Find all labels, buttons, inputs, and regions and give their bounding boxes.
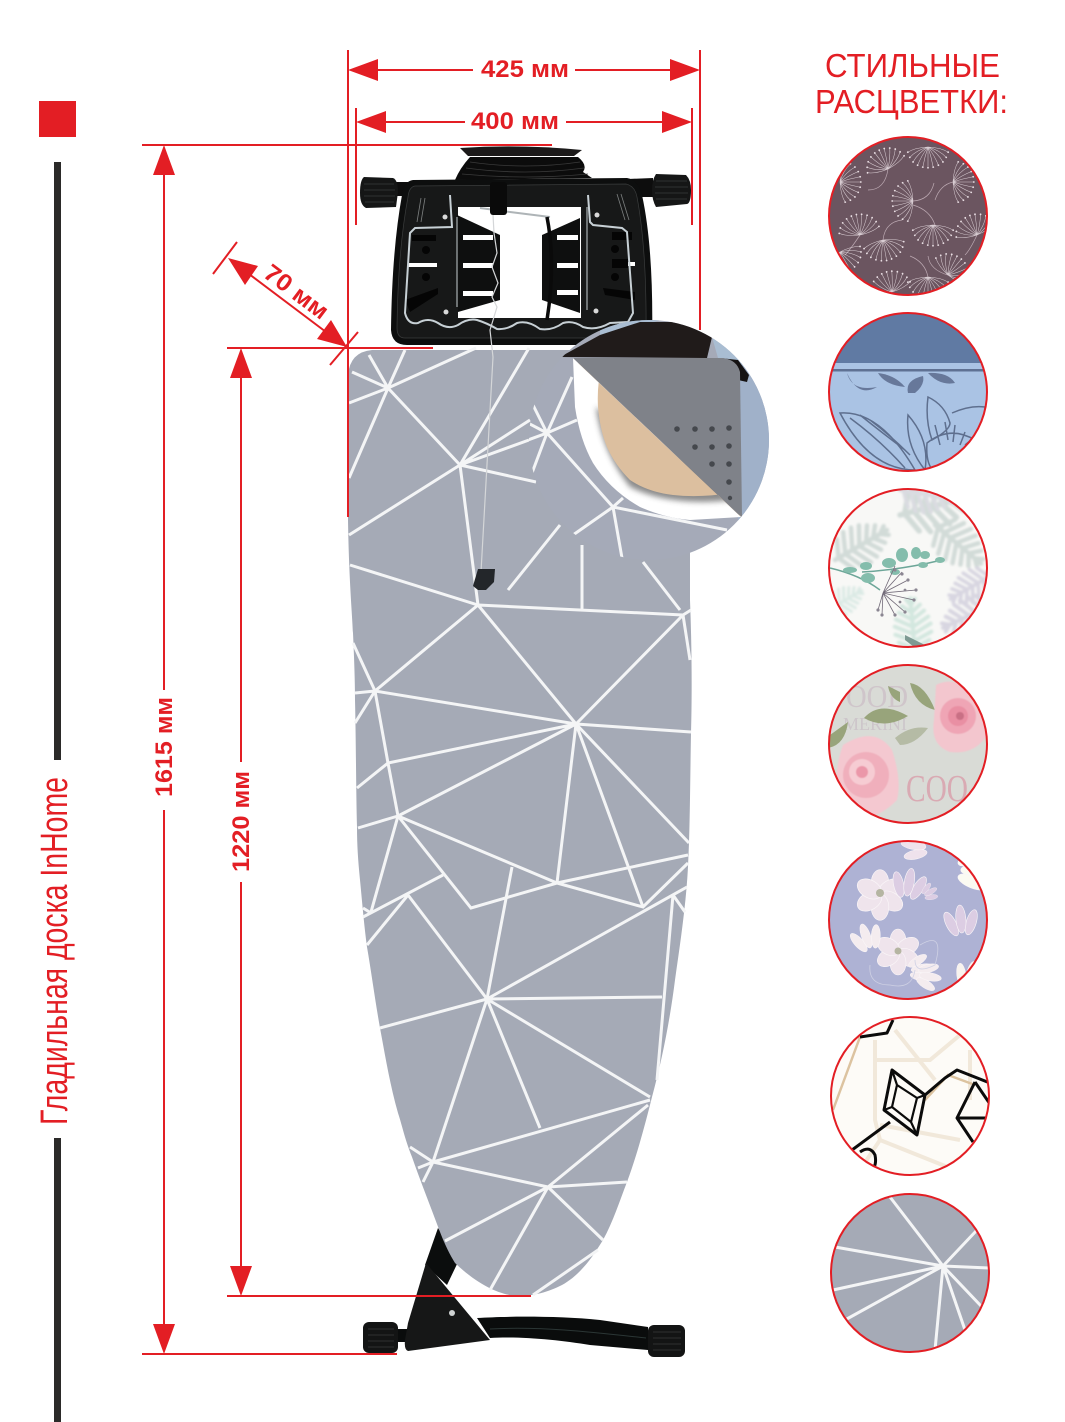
wire (481, 215, 498, 572)
plate dimples (405, 232, 635, 312)
tan shadow (596, 407, 733, 502)
label 1615: 1615 мм (151, 697, 178, 797)
inset dark band (560, 322, 712, 358)
dimension: 1615 mm (142, 145, 552, 1354)
red square marker (39, 101, 76, 137)
silver wire frame (405, 195, 633, 329)
left fin (457, 215, 500, 312)
tan layer (578, 363, 741, 517)
ironing board cover (348, 348, 692, 1296)
swatch 4: roses (828, 664, 988, 826)
swatch 7: grey with white lines (830, 1193, 990, 1353)
swatch 5: magnolias (828, 840, 988, 1000)
faded lettering: OOD (846, 678, 908, 714)
label 400: 400 мм (471, 108, 559, 135)
head (878, 566, 916, 615)
dimension: 400 mm (356, 108, 692, 225)
black cable (547, 217, 552, 320)
inset fabric lines (528, 377, 727, 558)
inset: underside detail (528, 320, 778, 565)
stand: right tube (477, 1317, 648, 1350)
white backing (573, 358, 741, 520)
board shape (348, 350, 692, 1296)
metal plate with cord (360, 146, 691, 345)
stand: pole (425, 1228, 458, 1285)
plate window (458, 207, 581, 318)
dimension: 425 mm (348, 50, 700, 517)
sprig (830, 560, 942, 590)
dimension: 1220 mm (227, 348, 531, 1296)
heading: stylish colours: РАСЦВЕТКИ: (815, 83, 1008, 120)
heading: stylish colours (815, 47, 1008, 120)
plate (391, 178, 652, 345)
swatch 4: roses: MERINI (843, 714, 907, 734)
label 70: 70 мм (258, 259, 334, 325)
label 425: 425 мм (481, 56, 569, 83)
stand: right knob (648, 1325, 685, 1357)
window bar (480, 208, 550, 217)
rose top (933, 682, 987, 752)
clip (473, 569, 495, 590)
swatch 1: plum dandelions (828, 136, 988, 296)
vertical title: Гладильная доска InHome (34, 777, 76, 1125)
ironing board stand (363, 1228, 685, 1357)
swatch 2: blue floral (828, 312, 988, 475)
inset background (529, 320, 770, 560)
swatch 6: geometric black and gold (830, 1016, 992, 1176)
swatch 3: ferns on white (828, 488, 988, 648)
inset upper corner (600, 320, 742, 365)
dimension: 70 mm (213, 242, 358, 365)
inset blue right side (738, 360, 769, 520)
cord coil (455, 146, 592, 180)
inset black knob (724, 358, 749, 382)
board geometric lines (349, 348, 691, 1295)
pull wire with clip (473, 215, 498, 590)
right fin (542, 218, 580, 313)
swatch 4: roses: COO (906, 768, 968, 810)
bolts (442, 212, 600, 314)
stand: bracket (405, 1263, 490, 1351)
vertical bar: lower (54, 1138, 61, 1422)
label 1220: 1220 мм (228, 771, 255, 872)
heading: stylish colours: СТИЛЬНЫЕ (825, 47, 1000, 84)
vertical bar: upper (54, 162, 61, 760)
left knob (360, 177, 416, 208)
slots (408, 235, 635, 296)
grey felt (573, 358, 742, 517)
rose left (837, 736, 899, 816)
leaves (828, 683, 935, 748)
stand: left connector (396, 1329, 412, 1342)
plate highlights (417, 194, 629, 222)
hanging clip (490, 182, 507, 215)
stand: left knob (363, 1322, 398, 1353)
right knob (628, 174, 691, 207)
felt holes (674, 425, 732, 500)
